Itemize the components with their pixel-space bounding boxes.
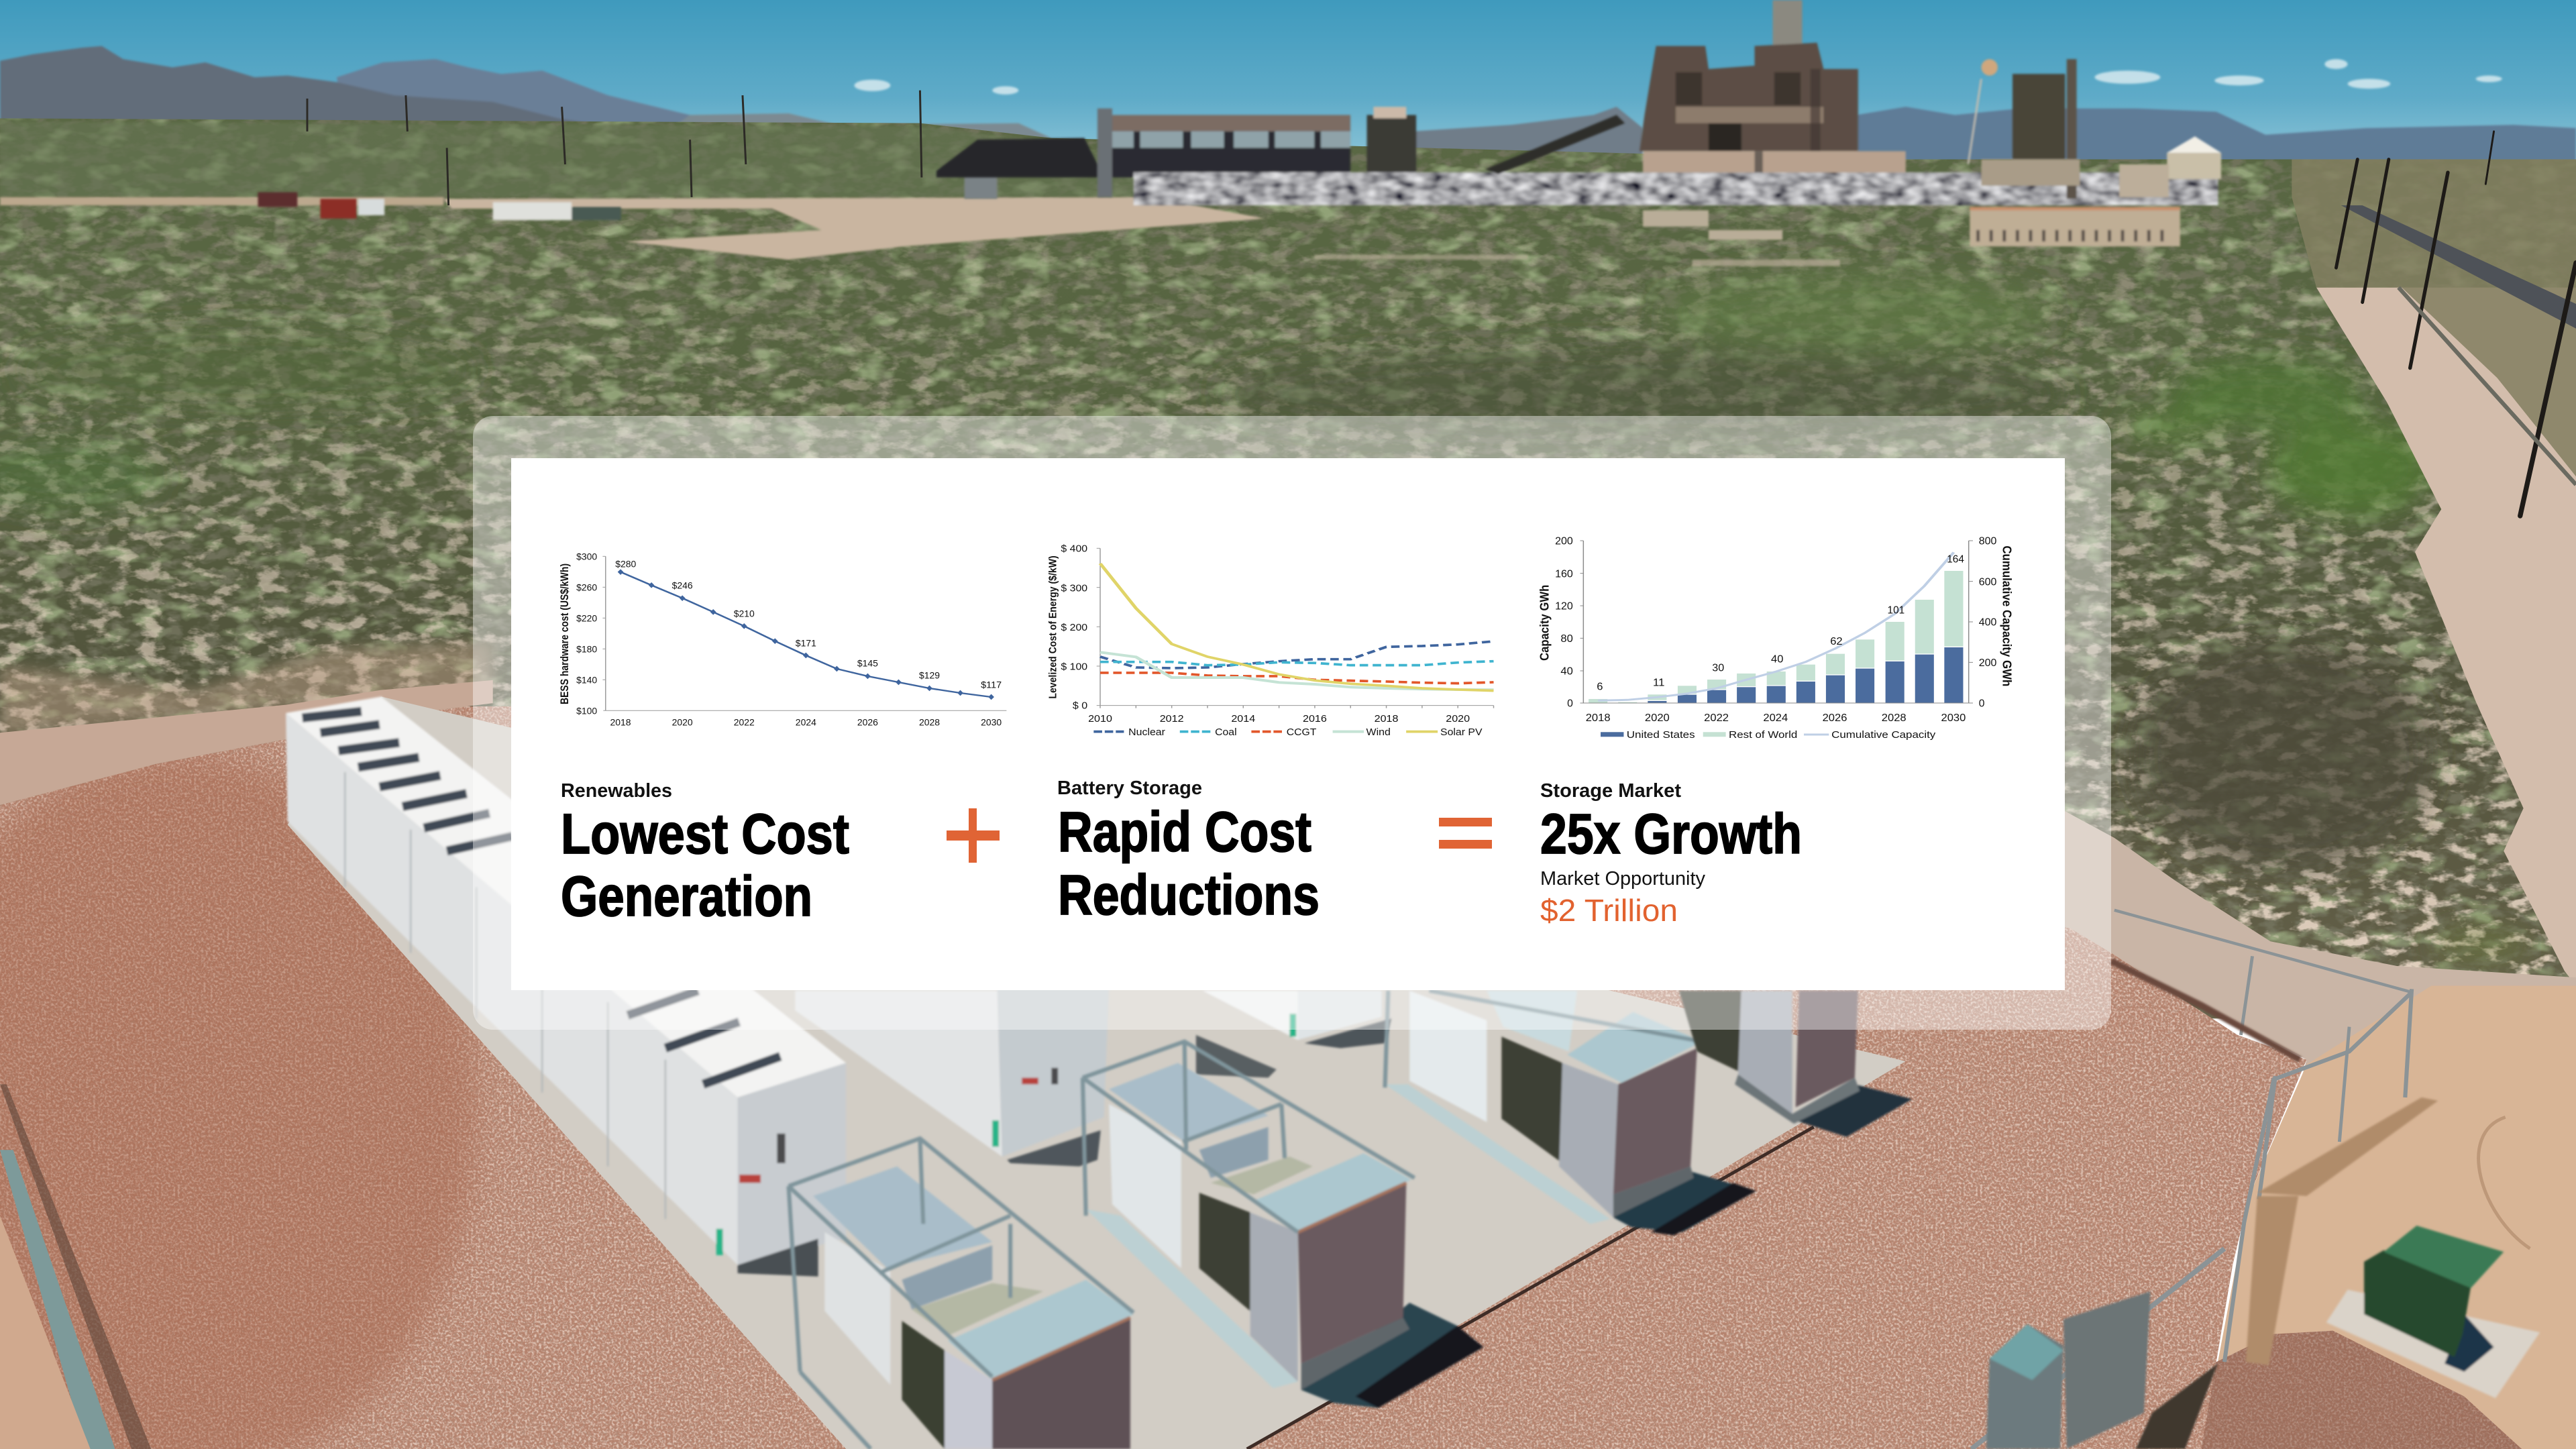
- plant: clutter at ground level: [1134, 172, 2218, 205]
- chart 3 left ticks: 80: [1560, 633, 1573, 645]
- chart 3 data labels: 101: [1888, 604, 1904, 616]
- chart 3 right y-axis title: Cumulative Capacity GWh: [2000, 545, 2013, 686]
- mountains left: [0, 46, 1051, 138]
- parked equipment: [258, 174, 998, 220]
- chart 2 legend: Solar PV: [1440, 726, 1483, 737]
- translucent glass panel: [473, 416, 2111, 1030]
- chart 1 data labels: $145: [857, 657, 878, 669]
- plant: second tower: [1968, 59, 2080, 199]
- chart 3 right ticks: 400: [1979, 617, 1996, 629]
- eyebrow: battery storage: Battery Storage: [1057, 777, 1202, 799]
- icon: equals sign: [1439, 818, 1492, 849]
- heading: rapid cost reductions: Reductions: [1058, 863, 1320, 926]
- chart 3 x labels: 2024: [1763, 712, 1788, 724]
- value: two trillion dollars: $2 Trillion: [1540, 893, 1678, 928]
- chart 1 x labels: 2020: [672, 716, 693, 728]
- tan ground band above the wall: [0, 641, 493, 736]
- far vegetation band: [0, 121, 1150, 197]
- utility poles right: [2336, 131, 2576, 516]
- chart 2 y ticks: $ 300: [1061, 582, 1087, 594]
- chart 2 x labels: 2012: [1160, 712, 1184, 724]
- heading: lowest cost generation: [561, 802, 849, 928]
- green transformer box: [2326, 1226, 2540, 1398]
- chart 3 data labels: 164: [1947, 554, 1964, 566]
- plant: chimney stack: [1772, 0, 1803, 46]
- tan strip along right fence and dirt ground: [2053, 805, 2576, 1449]
- chart: storage capacity stacked bars: [1538, 536, 2013, 740]
- chart 2 y ticks: $ 200: [1061, 621, 1087, 633]
- white battery block centre: [1196, 991, 1391, 1078]
- chart 1 data labels: $246: [672, 580, 693, 591]
- label: market opportunity: Market Opportunity: [1540, 868, 1705, 890]
- column 1 text: renewables: [561, 780, 849, 928]
- highway: [2341, 205, 2576, 329]
- chart 1 y ticks: $140: [576, 674, 597, 686]
- chart 3 legend: [1601, 729, 1936, 740]
- heading: 25x growth: 25x Growth: [1540, 802, 1802, 865]
- chart 1 x labels: 2024: [796, 716, 816, 728]
- chart 3 legend: Cumulative Capacity: [1831, 729, 1936, 740]
- chart 1 x labels: 2018: [610, 716, 631, 728]
- white battery row rear: [795, 985, 1109, 1167]
- chart 2 legend: Coal: [1215, 726, 1237, 737]
- chart 2 x labels: 2020: [1446, 712, 1470, 724]
- chart 3 data labels: [1597, 554, 1964, 692]
- chart 1 x labels: 2026: [857, 716, 878, 728]
- chart 3 data labels: 62: [1830, 636, 1843, 647]
- white card: [511, 458, 2065, 990]
- chart 2 series: coal: [1100, 661, 1494, 665]
- transformer skid A: [789, 1138, 1134, 1449]
- chart 2 legend: CCGT: [1287, 726, 1316, 737]
- chart 3 data labels: 11: [1653, 678, 1665, 689]
- chart 2 y-axis title: Levelized Cost of Energy ($/kW): [1047, 555, 1059, 699]
- site fence right: [1972, 910, 2412, 1449]
- chart 2 series: nuclear: [1100, 641, 1494, 668]
- chart 3 data labels: 40: [1771, 653, 1783, 665]
- chart 3 left ticks: 200: [1555, 536, 1573, 547]
- heading: lowest cost generation: Generation: [561, 865, 812, 928]
- chart 3 right ticks: 200: [1979, 657, 1996, 669]
- chart 3 x labels: 2020: [1645, 712, 1670, 724]
- eyebrow: renewables: Renewables: [561, 780, 672, 802]
- chart 3 left ticks: 40: [1560, 666, 1573, 678]
- chart 2 legend: Wind: [1366, 726, 1391, 737]
- transformer skid B: [1083, 1042, 1483, 1408]
- chart 2 y ticks: $ 100: [1061, 661, 1087, 672]
- chart 2 series: CCGT: [1100, 673, 1494, 684]
- plant: conveyor hall: [1097, 107, 1416, 197]
- chart 1 y ticks: $260: [576, 582, 597, 593]
- chart 3 right ticks: 0: [1979, 698, 1984, 710]
- chart 1 x labels: 2022: [734, 716, 755, 728]
- chart 1 y ticks: $100: [576, 705, 597, 716]
- chart 1 data labels: $171: [796, 637, 816, 649]
- chart 2 x labels: [1088, 712, 1470, 724]
- chart 3 x labels: [1586, 712, 1966, 724]
- chart 3 x labels: 2018: [1586, 712, 1611, 724]
- chart 1 x labels: 2030: [981, 716, 1002, 728]
- column 3 text: storage market: [1540, 780, 1802, 928]
- chart 1 y ticks: $300: [576, 551, 597, 562]
- chart 1 axes: [602, 556, 1006, 710]
- heading: lowest cost generation: Lowest Cost: [561, 802, 849, 865]
- chart 2 legend: [1093, 726, 1483, 737]
- desert scrub: [0, 118, 2576, 1022]
- chart 2 axes: [1097, 548, 1494, 708]
- chart 3 United States bars: [1648, 647, 1963, 703]
- chart 3 left ticks: [1555, 536, 1573, 710]
- chart 1 y ticks: $180: [576, 643, 597, 655]
- fence along road: [2399, 288, 2576, 484]
- mountains right: [1411, 107, 2576, 164]
- chart 3 data labels: 6: [1597, 681, 1603, 692]
- perimeter wall left: [0, 680, 493, 805]
- plant: boiler towers: [1640, 43, 1906, 172]
- chart 1 data labels: [615, 559, 1002, 690]
- plant: foreground pale structures: [1314, 210, 1840, 266]
- shadow of fence on gravel: [2111, 961, 2300, 1060]
- chart 3 right ticks: 800: [1979, 536, 1996, 547]
- dirt tyre tracks: [2479, 1117, 2530, 1248]
- dirt access road on right: [2316, 288, 2576, 985]
- bottom left sand: [0, 1216, 91, 1449]
- chart 3 legend: Rest of World: [1729, 729, 1797, 740]
- plant: coal pile: [936, 138, 1104, 177]
- grey cabinets at gate: [1986, 1291, 2218, 1449]
- chart 1 data labels: $210: [734, 608, 755, 619]
- sky: [0, 0, 2576, 164]
- chart 3 x labels: 2022: [1704, 712, 1729, 724]
- chart 2 x labels: 2014: [1231, 712, 1255, 724]
- chart 3 x labels: 2030: [1941, 712, 1966, 724]
- column 2 text: battery storage: [1057, 777, 1320, 926]
- eyebrow: storage market: Storage Market: [1540, 780, 1681, 802]
- white battery row front: [286, 696, 846, 1277]
- chart 1 y-axis title: BESS hardware cost (US$/kWh): [558, 564, 571, 704]
- chart 3 left y-axis title: Capacity GWh: [1538, 585, 1552, 661]
- chart 1 data labels: $129: [919, 669, 940, 681]
- chart 3 data labels: 30: [1712, 663, 1724, 674]
- gravel: [0, 706, 2576, 1449]
- chart 2 x labels: 2010: [1088, 712, 1112, 724]
- chart 1 y ticks: [576, 551, 597, 716]
- chart 2 x labels: 2016: [1303, 712, 1327, 724]
- chart 1 x labels: [610, 716, 1002, 728]
- far clearing and service road: [0, 197, 1265, 260]
- chart 1 data labels: $280: [615, 559, 637, 570]
- chart 1 markers: [618, 569, 994, 700]
- heading: rapid cost reductions: Rapid Cost: [1058, 800, 1311, 863]
- chart 2 x labels: 2018: [1375, 712, 1398, 724]
- plant: silo: [2119, 136, 2221, 197]
- pad edge shadow: [1247, 1127, 1814, 1449]
- transformer skid D: [1679, 991, 1913, 1137]
- power plant: [936, 0, 2221, 266]
- chart 3 axes: [1580, 541, 1973, 703]
- icon: plus sign: [947, 808, 1000, 863]
- heading: rapid cost reductions: [1058, 800, 1320, 926]
- plant: turbine hall building: [1970, 207, 2180, 246]
- chart 1 x labels: 2028: [919, 716, 940, 728]
- left outer fence: [0, 1150, 115, 1449]
- transformer skid C: [1385, 991, 1756, 1236]
- chart 1 line: [621, 572, 991, 697]
- chart: levelized cost of energy line chart: [1047, 543, 1494, 737]
- chart 2 y ticks: [1061, 543, 1087, 711]
- chart 3 right ticks: 600: [1979, 577, 1996, 588]
- chart 3 left ticks: 160: [1555, 569, 1573, 580]
- utility poles left: [307, 91, 922, 205]
- concrete pad: [288, 696, 1906, 1449]
- chart 1 data labels: $117: [981, 679, 1002, 690]
- chart 2 y ticks: $ 400: [1061, 543, 1087, 554]
- chart 2 legend: Nuclear: [1128, 726, 1165, 737]
- chart 3 x labels: 2026: [1823, 712, 1847, 724]
- clouds: [854, 59, 2502, 95]
- chart 2 series: solar PV: [1100, 564, 1494, 691]
- chart 3 x labels: 2028: [1882, 712, 1907, 724]
- chart 2 series: wind: [1100, 652, 1494, 690]
- chart: BESS hardware cost line chart: [558, 551, 1006, 728]
- plant: conveyor belt: [1485, 115, 1625, 174]
- chart 1 y ticks: $220: [576, 612, 597, 624]
- chart 3 right ticks: [1979, 536, 1996, 710]
- roadside land beyond the road: [2292, 160, 2576, 476]
- chart 3 legend: United States: [1627, 729, 1695, 740]
- chart 2 y ticks: $ 0: [1073, 700, 1087, 711]
- chart 3 rest of world bars: [1589, 571, 1963, 703]
- chart 3 left ticks: 0: [1567, 698, 1573, 710]
- chart 3 left ticks: 120: [1555, 601, 1573, 612]
- wood footings: [2246, 1097, 2438, 1365]
- chart 3 cumulative capacity line: [1598, 552, 1953, 700]
